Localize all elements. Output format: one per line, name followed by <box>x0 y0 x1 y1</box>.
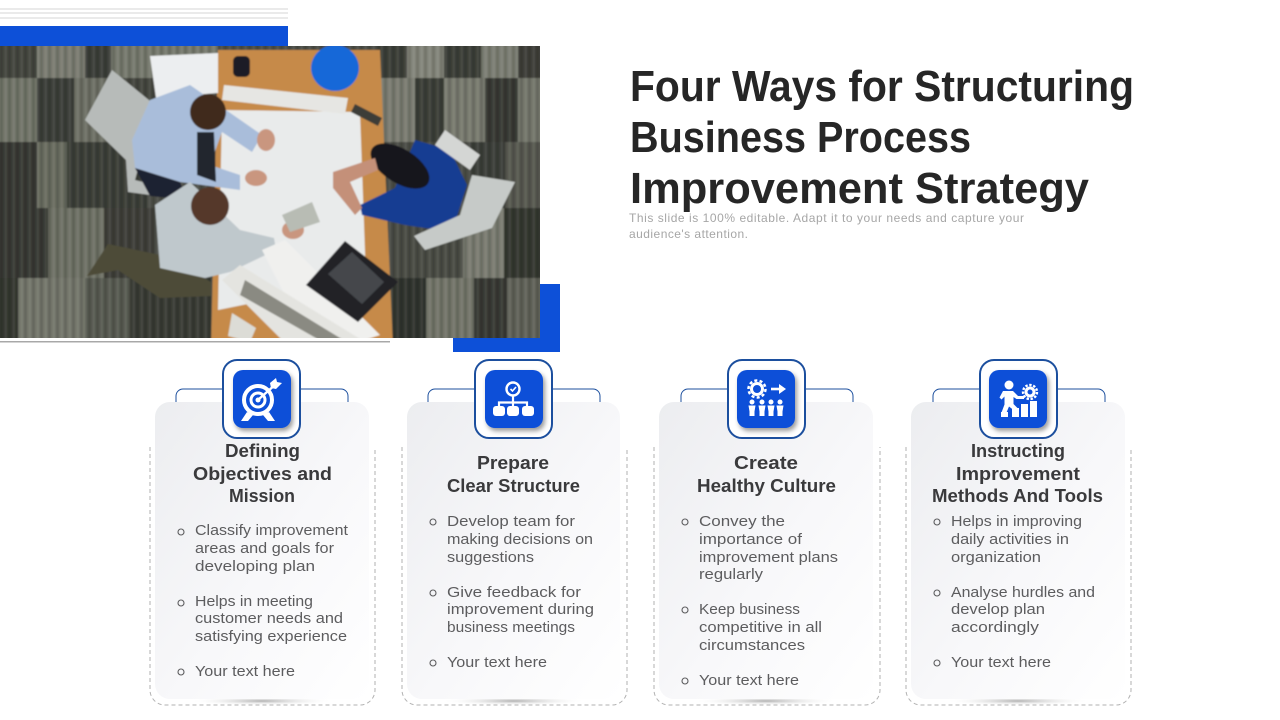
table <box>211 50 393 348</box>
bullet list: Classify improvement <box>195 522 349 539</box>
heading: Defining <box>225 440 300 461</box>
bullet list: Give feedback for <box>447 584 581 601</box>
bullet list: satisfying experience <box>195 628 347 645</box>
title: Business Process <box>630 114 971 162</box>
line under photo <box>0 341 390 342</box>
bullet list: develop plan <box>951 601 1045 618</box>
bullet list: business meetings <box>447 619 575 636</box>
bullet list: Develop team for <box>447 513 575 530</box>
subtitle: audience's attention. <box>629 227 748 241</box>
heading: Instructing <box>971 440 1065 461</box>
bullet list: developing plan <box>195 558 315 575</box>
icon: target with arrow <box>241 378 282 421</box>
heading: Prepare <box>477 452 549 473</box>
photo: team working around a table <box>0 46 540 338</box>
roll top <box>222 85 348 114</box>
bullet list <box>682 513 838 689</box>
bullet list: Keep business <box>699 601 800 618</box>
man 2 <box>87 244 211 298</box>
bullet list: suggestions <box>447 549 534 566</box>
bullet list: competitive in all <box>699 619 822 636</box>
heading: Objectives and <box>193 463 332 484</box>
carpet blocks <box>0 46 540 338</box>
bullet list: Helps in improving <box>951 513 1082 530</box>
bullet list: daily activities in <box>951 531 1069 548</box>
panel: prepare clear structure <box>402 360 627 706</box>
bullet list: importance of <box>699 531 803 548</box>
blue bar above photo <box>0 26 288 46</box>
bullet list: regularly <box>699 566 764 583</box>
phone <box>351 104 382 126</box>
laptop <box>306 241 398 322</box>
bullet list: areas and goals for <box>195 540 334 557</box>
bullet list: circumstances <box>699 637 805 654</box>
calculator <box>282 202 320 232</box>
heading <box>193 440 332 506</box>
blue block behind photo <box>453 284 560 352</box>
title <box>630 63 1134 213</box>
bullet list: accordingly <box>951 619 1040 636</box>
heading <box>932 440 1103 506</box>
mug <box>233 56 250 77</box>
bullet list: organization <box>951 549 1041 566</box>
title: Improvement Strategy <box>630 165 1089 213</box>
heading: Healthy Culture <box>697 475 836 496</box>
heading <box>447 452 580 496</box>
bullet list: improvement during <box>447 601 594 618</box>
top papers <box>150 53 218 98</box>
bullet list <box>178 522 349 680</box>
hard hat <box>311 45 359 91</box>
bullet list: Helps in meeting <box>195 593 313 610</box>
subtitle: This slide is 100% editable. Adapt it to your needs and capture your <box>629 211 1024 225</box>
bullet list <box>934 513 1095 671</box>
man 1 <box>132 85 262 190</box>
panel: instructing improvement methods and tools <box>906 360 1131 706</box>
panel: create healthy culture <box>654 360 880 706</box>
decorative top lines <box>0 9 288 18</box>
bullet list: Your text here <box>951 654 1051 671</box>
icon: person climbing bars with gear <box>1000 380 1037 417</box>
bullet list: Convey the <box>699 513 785 530</box>
bottom paper <box>228 313 256 342</box>
bottom rolls <box>262 244 381 338</box>
panel: defining objectives and mission <box>150 360 375 706</box>
icon: organisation chart with check <box>493 382 534 416</box>
heading: Methods And Tools <box>932 485 1103 506</box>
woman <box>360 140 467 232</box>
bullet list <box>430 513 594 671</box>
bullet list: customer needs and <box>195 610 343 627</box>
blueprint paper <box>218 110 366 310</box>
bullet list: improvement plans <box>699 549 838 566</box>
bullet list: Your text here <box>447 654 547 671</box>
left chair <box>84 70 150 196</box>
right chair <box>414 175 515 250</box>
bullet list: Your text here <box>195 663 295 680</box>
heading: Mission <box>229 485 295 506</box>
heading: Clear Structure <box>447 475 580 496</box>
title: Four Ways for Structuring <box>630 63 1134 111</box>
bullet list: making decisions on <box>447 531 593 548</box>
bullet list: Analyse hurdles and <box>951 584 1095 601</box>
heading <box>697 452 836 496</box>
heading: Create <box>734 452 798 473</box>
icon: gear, arrow and people <box>748 380 786 416</box>
subtitle <box>629 211 1024 241</box>
heading: Improvement <box>956 463 1080 484</box>
bullet list: Your text here <box>699 672 799 689</box>
